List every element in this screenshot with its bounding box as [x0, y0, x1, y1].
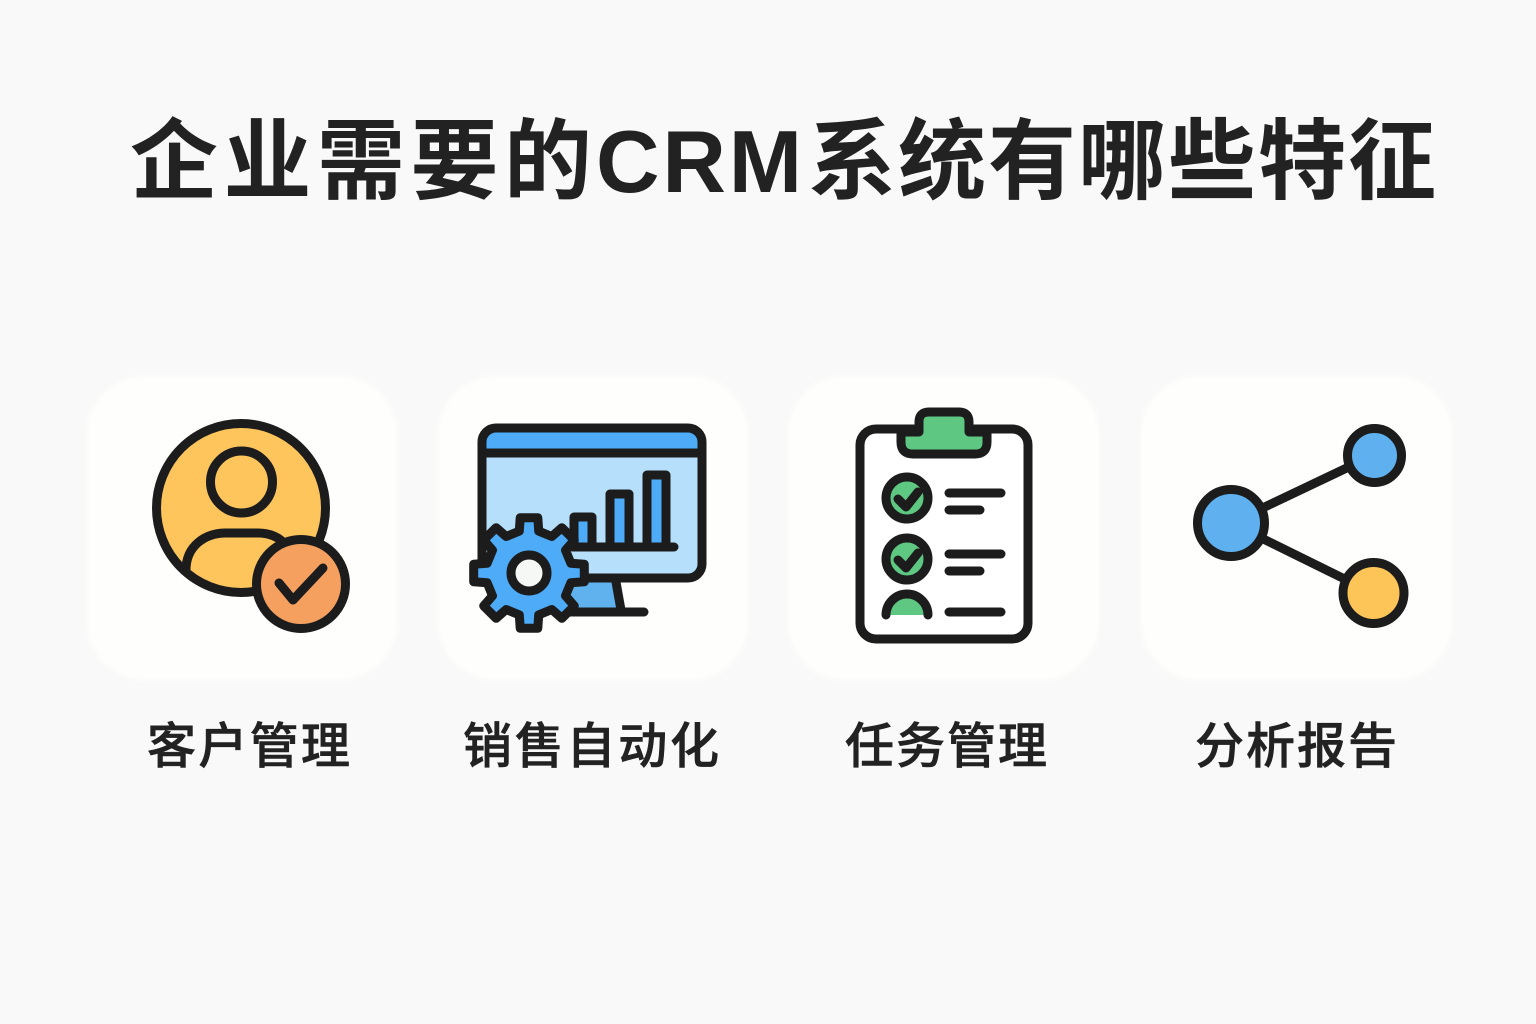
- title: 系统有哪些特征: [808, 112, 1436, 211]
- icon: clipboard checklist: [860, 412, 1028, 639]
- label: 销售自动化: [463, 707, 719, 778]
- card background: [438, 376, 748, 680]
- label: 客户管理: [147, 707, 350, 778]
- panel: task management: [788, 376, 1099, 778]
- icon: user with check badge: [156, 424, 346, 628]
- title: 企业需要的: [130, 112, 592, 211]
- icon: monitor with bar chart and gear: [474, 428, 702, 628]
- title: [130, 112, 1436, 211]
- card background: [1141, 376, 1452, 680]
- panel: analytics report: [1141, 376, 1452, 778]
- label: 分析报告: [1195, 707, 1397, 778]
- card background: [788, 376, 1099, 680]
- panel: customer management: [87, 376, 397, 778]
- title: CRM: [596, 112, 802, 211]
- label: 任务管理: [845, 707, 1047, 778]
- icon: share network nodes: [1198, 428, 1404, 624]
- card background: [87, 376, 397, 680]
- panel: sales automation: [438, 376, 748, 778]
